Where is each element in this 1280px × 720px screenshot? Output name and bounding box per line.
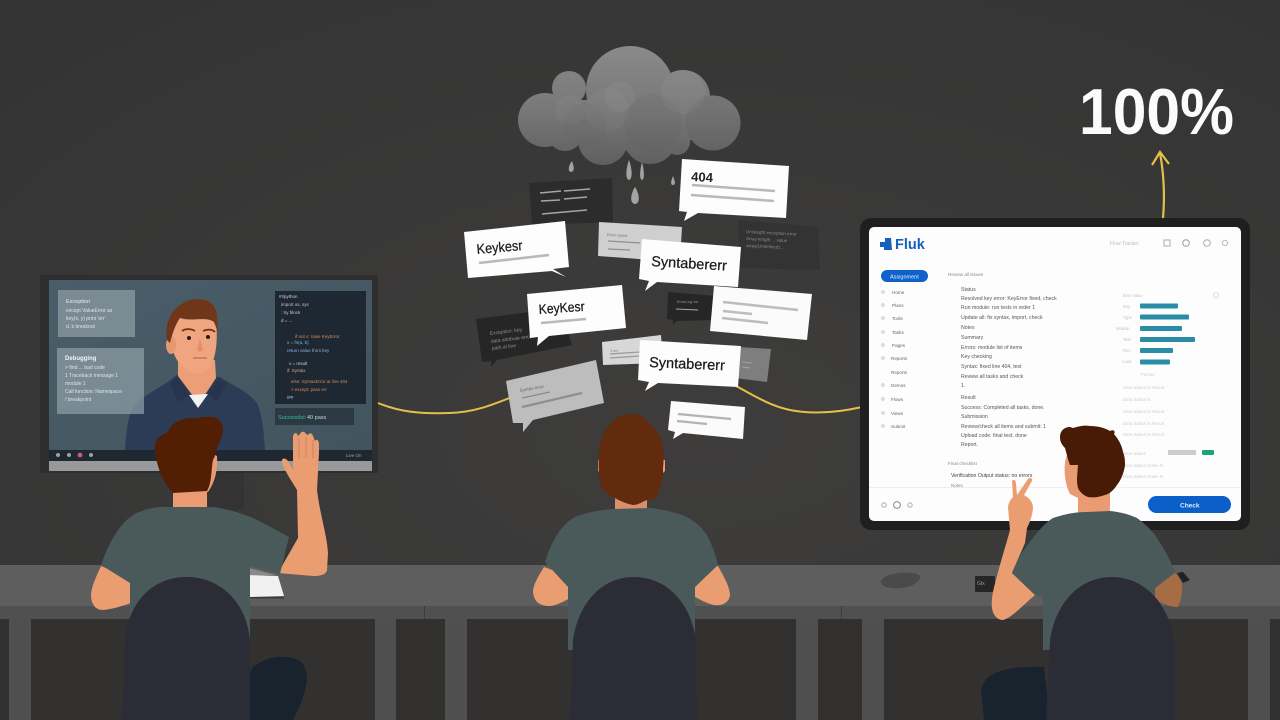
bar chart: Item Value — [1123, 293, 1143, 298]
bar chart: Run — [1123, 348, 1131, 353]
results table: Data Status N Result — [1123, 385, 1165, 390]
main instruction list: 1. — [961, 383, 965, 389]
shirt — [545, 508, 718, 650]
desk — [0, 565, 1280, 720]
sidebar menu: Plans — [892, 303, 904, 308]
storm cloud — [518, 46, 740, 165]
sidebar menu: Tools — [892, 316, 903, 321]
bubble: grey error: Syntax error — [519, 384, 545, 393]
sidebar menu: Submit — [891, 424, 906, 429]
chair: right — [1046, 577, 1175, 720]
bubble: KeyKesr top: Keykesr — [476, 237, 523, 257]
sidebar menu: Reports — [891, 356, 908, 361]
bubble: KeyKesr top — [464, 221, 569, 278]
bar chart: Module — [1116, 326, 1130, 331]
results table: Data Status N Result — [1123, 409, 1165, 414]
logo: Fluk: Fluk — [895, 237, 926, 253]
connector: monitor to errors — [378, 397, 512, 413]
main instruction list: Final checklist — [948, 461, 978, 466]
panel: code editor: /## — [287, 395, 294, 400]
sidebar menu: Home — [892, 290, 905, 295]
main instruction list: Resolved key error: KeyError fixed, check — [961, 296, 1057, 302]
bubble: dark log left: data attribute error — [491, 334, 532, 345]
main instruction list: Review all tasks and check — [961, 374, 1024, 380]
status box: Successful: — [278, 415, 307, 421]
panel: debugging note — [57, 348, 144, 414]
sidebar menu: Demos — [891, 383, 906, 388]
video call toolbar — [49, 450, 372, 471]
left arm — [91, 566, 135, 610]
card: dark log: Array length ... value — [746, 236, 788, 243]
panel: debugging note: Call function: Namespace — [65, 389, 122, 395]
neck — [173, 488, 207, 510]
main instruction list: Report. — [961, 442, 978, 448]
bubble: SyntaxError lower: Syntabererr — [649, 355, 725, 374]
panel: code editor: x = result — [289, 361, 308, 366]
tablet dashboard — [860, 218, 1250, 530]
card: pale grey note — [598, 222, 682, 262]
right arm — [1155, 573, 1182, 607]
main instruction list: Upload code: final test, done — [961, 433, 1027, 439]
main instruction list: Notes — [961, 325, 975, 331]
panel: code editor: d = ... — [281, 318, 292, 323]
panel: description note: d, k breakout — [66, 324, 96, 330]
card: small pale note — [602, 335, 663, 365]
rain drops — [569, 160, 675, 204]
bubble: dark log left: Exception: key — [490, 327, 523, 337]
panel: code editor: if: Syntax — [287, 368, 306, 373]
panel: debugging note: module 1 — [65, 381, 86, 387]
bubble: KeyKesr middle — [527, 285, 626, 346]
ears — [598, 460, 665, 473]
panel: debugging note: 1 Traceback message 1 — [65, 373, 118, 379]
main instruction list: Notes — [951, 483, 964, 488]
main instruction list: Review/check all items and submit: 1 — [961, 424, 1046, 430]
bubble: 404: 404 — [691, 169, 714, 185]
sidebar menu: Pages — [892, 343, 906, 348]
card: dark list — [529, 178, 613, 225]
results table: Tracker — [1140, 372, 1155, 377]
main instruction list: Status — [961, 287, 976, 293]
results table: Data Status — [1123, 451, 1147, 456]
finger separators — [299, 437, 313, 458]
panel: debugging note: Debugging — [65, 356, 97, 362]
ear and jaw — [200, 450, 217, 492]
raised arm and hand — [278, 432, 328, 576]
status box: 40 pass — [307, 415, 327, 421]
connector: errors to tablet — [736, 386, 862, 413]
arms — [533, 566, 730, 606]
main instruction list: Run module: run tests in order 1 — [961, 305, 1035, 311]
student: right, pointing at tablet — [992, 426, 1182, 650]
bar chart: Type — [1123, 315, 1133, 320]
main instruction list: Success: Completed all tasks, done. — [961, 405, 1045, 411]
top bar icons: Flow Tracker — [1110, 241, 1139, 247]
panel: code editor: x = fn(a, b) — [287, 340, 309, 345]
hair — [599, 414, 664, 505]
panel: description note: Exception — [66, 299, 90, 305]
chair: left — [122, 577, 250, 720]
shirt — [101, 507, 289, 642]
bubble: dark small — [667, 292, 716, 325]
main instruction list: Verification Output status: no errors — [951, 473, 1033, 479]
panel: code editor: #!/python — [279, 294, 298, 299]
shirt — [1012, 511, 1175, 650]
bar chart: Key — [1123, 304, 1131, 309]
panel: code editor: : try block — [281, 310, 301, 315]
top bar icons — [1110, 240, 1228, 247]
panel: debugging note: > find ... bad code — [65, 365, 105, 371]
bubble: 404 — [679, 159, 789, 221]
main instruction list: Review all issues — [948, 272, 984, 277]
footer bar — [869, 487, 1241, 513]
status box — [275, 408, 354, 425]
footer bar: Check — [1180, 502, 1200, 510]
pointing arm and hand — [992, 478, 1035, 620]
main instruction list: Summary — [961, 335, 984, 341]
results table: Data Status N — [1123, 397, 1150, 402]
bubble: dark small: ErrorLog: err — [677, 300, 699, 304]
bubble: dark log left: path at line — [492, 343, 517, 352]
panel: code editor: import os, sys — [281, 302, 310, 307]
logo: Fluk — [880, 237, 926, 253]
bubble: small white — [668, 401, 745, 439]
panel: description note: key(x, y) print 'err' — [66, 316, 105, 322]
student: centre — [533, 414, 730, 650]
card: grey note — [735, 347, 771, 382]
main instruction list: Update all: fix syntax, import, check — [961, 315, 1043, 321]
card: pale grey note: Error report — [607, 232, 629, 238]
sidebar menu: Reports — [891, 370, 908, 375]
neck — [615, 494, 647, 511]
card: dark log — [738, 220, 820, 270]
bar chart: Test — [1123, 337, 1132, 342]
student: left, raising hand — [91, 417, 328, 642]
sidebar menu — [881, 270, 928, 429]
bubble: SyntaxError top — [639, 239, 741, 291]
results table: Data Status N Result — [1123, 421, 1165, 426]
arrow: up to 100% — [1152, 152, 1169, 218]
main instruction list: Errors: module list of items — [961, 345, 1023, 351]
panel: code editor: > except: pass err — [291, 387, 327, 392]
sidebar menu: Tasks — [892, 330, 904, 335]
bubble: SyntaxError lower — [638, 340, 741, 391]
neck and face edge — [1065, 455, 1110, 514]
bubble: SyntaxError top: Syntabererr — [651, 254, 728, 275]
headline figure: 100%: 100% — [1079, 75, 1234, 148]
results table — [1123, 372, 1214, 479]
card: dark log: Uncaught exception error — [746, 229, 797, 237]
main instruction list: Submission — [961, 414, 988, 420]
left video monitor — [40, 275, 378, 473]
panel: code editor: if not x: raise KeyError — [295, 334, 340, 339]
panel: code editor — [275, 291, 366, 404]
sidebar menu: Assignment — [890, 274, 919, 280]
card: blank white note — [710, 286, 812, 340]
card: dark log: array(Undefined)... — [746, 243, 784, 250]
sidebar menu: Views — [891, 411, 904, 416]
panel: description note: except ValueError as — [66, 308, 113, 314]
panel: code editor: return value from key — [287, 348, 330, 353]
panel: debugging note: / breakpoint — [65, 397, 92, 403]
sidebar menu: Flows — [891, 397, 904, 402]
chair: centre — [570, 577, 697, 720]
results table: Data Status N Result — [1123, 432, 1165, 437]
bar chart — [1116, 292, 1218, 364]
video call toolbar: Live On — [346, 453, 362, 458]
bubble: KeyKesr middle: KeyKesr — [538, 299, 586, 317]
main instruction list: Result — [961, 395, 976, 401]
main instruction list: Syntax: fixed line 404, test — [961, 364, 1022, 370]
results table: Data Status Notes N — [1123, 474, 1163, 479]
main instruction list — [948, 272, 1057, 488]
card: small pale note: 1 err — [610, 348, 619, 353]
student legs — [250, 657, 1050, 720]
monitor stand — [208, 473, 244, 510]
bar chart: Load — [1122, 359, 1132, 364]
main instruction list: Key checking — [961, 354, 992, 360]
hair — [155, 417, 223, 493]
on-screen presenter — [125, 299, 265, 450]
bubble: grey error — [506, 360, 604, 432]
results table: Data Status Notes N — [1123, 463, 1163, 468]
panel: code editor: else: SyntaxError at line 404 — [291, 379, 348, 384]
desk items: Gtx — [977, 581, 985, 587]
desk items — [249, 568, 1190, 598]
hair — [1060, 426, 1125, 497]
bubble: dark log left — [476, 308, 572, 367]
panel: description note — [58, 290, 135, 337]
